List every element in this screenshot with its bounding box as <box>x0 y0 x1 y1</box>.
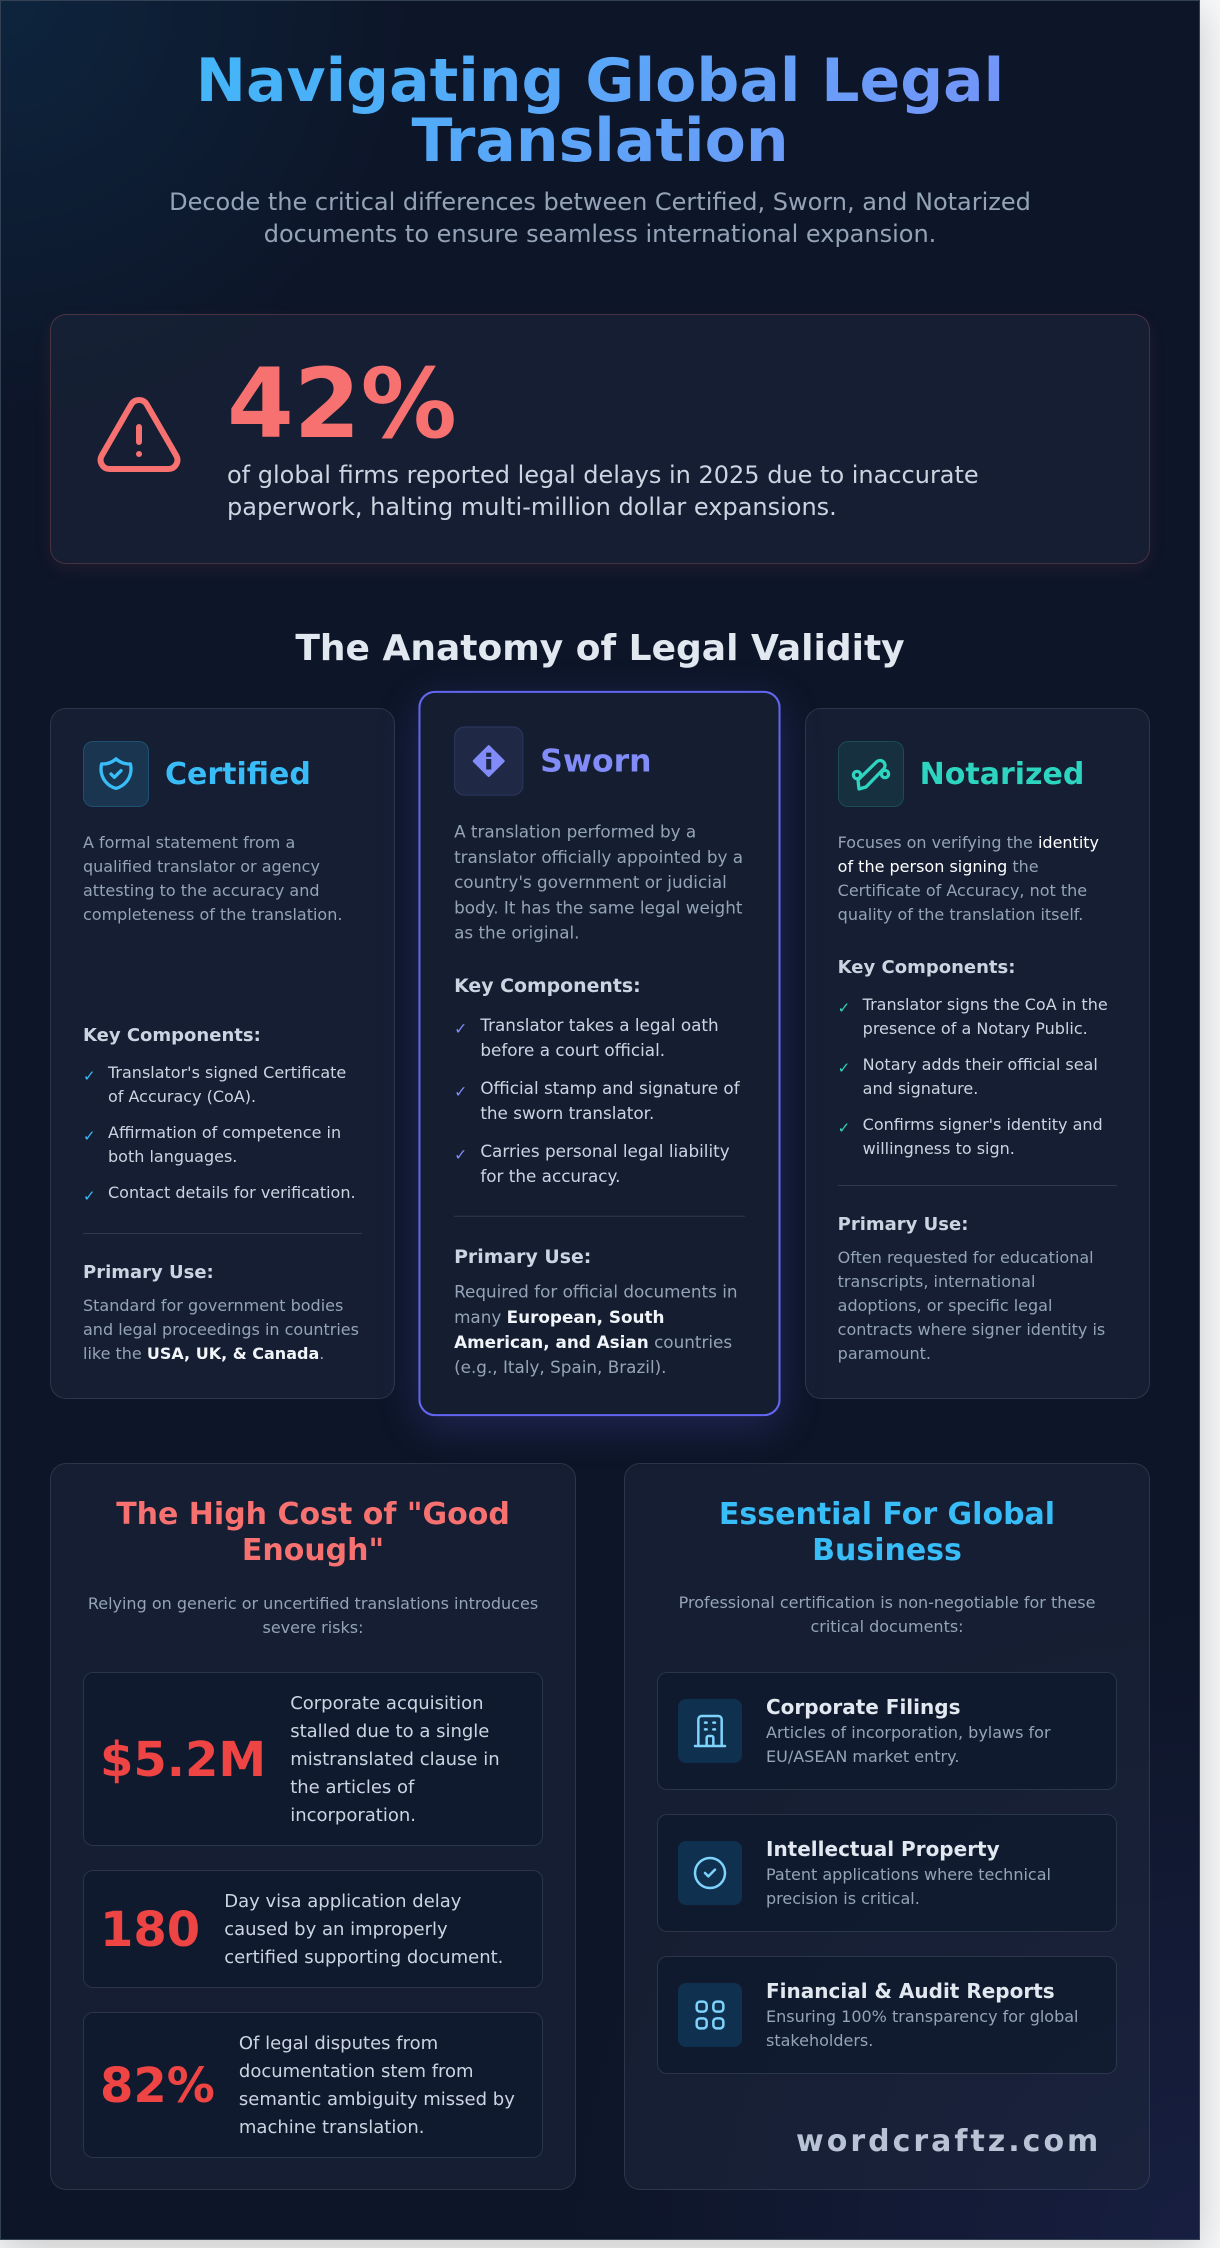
risk: 180 days <box>83 1870 543 1988</box>
risk: 82% <box>83 2012 543 2158</box>
notarized description: of the person signing the <box>838 857 1039 876</box>
stat text: documentation stem from <box>239 2061 474 2082</box>
icon: diamond info <box>454 726 524 796</box>
panel: sworn (featured) <box>419 691 781 1416</box>
key components list <box>454 1015 740 1186</box>
sworn description: as the original. <box>454 923 580 943</box>
panel: essential for global business <box>624 1463 1150 2190</box>
stat text: Corporate acquisition <box>290 1693 484 1714</box>
section heading: The Anatomy of Legal Validity <box>295 628 905 669</box>
big number 42%: 42% <box>227 348 457 460</box>
icon: shield check <box>83 741 149 807</box>
item text: Patent applications where technical <box>766 1865 1051 1884</box>
primary use heading: Primary Use: <box>83 1262 214 1283</box>
subtitle: documents to ensure seamless international expansion. <box>264 220 936 248</box>
panel intro <box>679 1593 1095 1636</box>
heading: sworn: Sworn <box>540 743 652 780</box>
panel heading <box>719 1497 1055 1568</box>
certified description: A formal statement from a <box>83 833 295 852</box>
icon: warning triangle <box>98 397 180 472</box>
key components heading: Key Components: <box>838 957 1015 978</box>
primary use text: transcripts, international <box>838 1272 1035 1291</box>
key components list: ✓ <box>838 1059 850 1077</box>
sworn description: A translation performed by a <box>454 822 697 842</box>
stat text: stalled due to a single <box>290 1721 489 1742</box>
alert text: of global firms reported legal delays in 2025 due to inaccurate <box>227 461 979 489</box>
panel: certified <box>50 708 395 1399</box>
stat: 180 <box>100 1902 200 1958</box>
primary use text: paramount. <box>838 1344 931 1363</box>
panel intro: severe risks: <box>262 1618 364 1637</box>
panel intro: Relying on generic or uncertified translations introduces <box>88 1594 538 1613</box>
document: financial and audit reports <box>657 1956 1117 2074</box>
item text <box>766 2007 1078 2050</box>
key components list: of Accuracy (CoA). <box>108 1087 256 1106</box>
panel intro: Professional certification is non-negotiable for these <box>679 1593 1095 1612</box>
key components list: ✓ <box>454 1082 468 1101</box>
certified description: qualified translator or agency <box>83 857 320 876</box>
key components heading: Key Components: <box>83 1025 261 1046</box>
brand watermark: wordcraftz.com <box>796 2124 1101 2159</box>
primary use text: (e.g., Italy, Spain, Brazil). <box>454 1357 667 1377</box>
item text: stakeholders. <box>766 2031 873 2050</box>
sworn description <box>454 822 743 943</box>
icon: building <box>678 1699 742 1763</box>
certified description: completeness of the translation. <box>83 905 342 924</box>
alert text: paperwork, halting multi-million dollar expansions. <box>227 493 837 521</box>
key components list: ✓ <box>83 1067 96 1085</box>
stat text: Of legal disputes from <box>239 2033 438 2054</box>
primary use text: contracts where signer identity is <box>838 1320 1105 1339</box>
stat text: mistranslated clause in <box>290 1749 500 1770</box>
primary use text <box>838 1248 1105 1363</box>
stat text <box>290 1693 500 1826</box>
stat text: the articles of <box>290 1777 414 1798</box>
key components list: Carries personal legal liability <box>481 1141 730 1161</box>
subtitle: Decode the critical differences between Certified, Sworn, and Notarized <box>169 188 1031 216</box>
icon: check circle <box>678 1841 742 1905</box>
title: Navigating Global Legal <box>196 46 1004 116</box>
panel heading: Enough" <box>242 1533 384 1568</box>
primary use text: and legal proceedings in countries <box>83 1320 359 1339</box>
document: corporate filings <box>657 1672 1117 1790</box>
key components list: ✓ <box>838 999 850 1017</box>
key components list: the sworn translator. <box>481 1103 655 1123</box>
key components list: willingness to sign. <box>863 1139 1015 1158</box>
item text: Articles of incorporation, bylaws for <box>766 1723 1051 1742</box>
key components list: Translator takes a legal oath <box>481 1015 719 1035</box>
certified description <box>83 833 342 924</box>
title <box>50 51 1150 171</box>
key components list: Confirms signer's identity and <box>863 1115 1103 1134</box>
primary use text <box>454 1282 738 1377</box>
primary use text <box>83 1296 359 1363</box>
key components list: ✓ <box>454 1019 468 1038</box>
stat text: incorporation. <box>290 1805 416 1826</box>
primary use text: Often requested for educational <box>838 1248 1094 1267</box>
subtitle <box>169 188 1031 248</box>
stat text: Day visa application delay <box>224 1891 461 1912</box>
stat text: semantic ambiguity missed by <box>239 2089 515 2110</box>
key components list <box>83 1063 356 1205</box>
stat text: machine translation. <box>239 2117 424 2138</box>
primary use heading: Primary Use: <box>454 1246 592 1268</box>
panel intro <box>88 1594 538 1637</box>
item title: Financial & Audit Reports <box>766 1979 1055 2003</box>
certified description: attesting to the accuracy and <box>83 881 320 900</box>
key components list <box>838 995 1108 1158</box>
heading: certified: Certified <box>165 757 311 792</box>
icon: pencil and seal <box>838 741 904 807</box>
sworn description: body. It has the same legal weight <box>454 898 743 918</box>
icon: grid <box>678 1983 742 2047</box>
item text: precision is critical. <box>766 1889 920 1908</box>
notarized description: Focuses on verifying the identity <box>838 833 1099 852</box>
stat text <box>239 2033 515 2138</box>
stat text: certified supporting document. <box>224 1947 503 1968</box>
title: Translation <box>411 106 789 176</box>
item text <box>766 1865 1051 1908</box>
document: intellectual property <box>657 1814 1117 1932</box>
panel heading <box>116 1497 510 1568</box>
panel intro: critical documents: <box>810 1617 964 1636</box>
key components list: and signature. <box>863 1079 978 1098</box>
primary use heading: Primary Use: <box>838 1214 968 1235</box>
key components list: Translator signs the CoA in the <box>863 995 1108 1014</box>
panel: notarized <box>805 708 1150 1399</box>
risk: $5.2M <box>83 1672 543 1846</box>
key components list: Translator's signed Certificate <box>108 1063 346 1082</box>
key components list: ✓ <box>454 1145 468 1164</box>
panel: 42% alert statistic <box>50 314 1150 564</box>
key components list: ✓ <box>83 1127 96 1145</box>
item title: Corporate Filings <box>766 1695 960 1719</box>
primary use text: like the USA, UK, & Canada. <box>83 1344 324 1363</box>
panel heading: The High Cost of "Good <box>116 1497 510 1532</box>
primary use text: adoptions, or specific legal <box>838 1296 1052 1315</box>
key components list: presence of a Notary Public. <box>863 1019 1088 1038</box>
item text: EU/ASEAN market entry. <box>766 1747 959 1766</box>
primary use text: many European, South <box>454 1307 665 1327</box>
stat: $5.2M <box>100 1732 266 1788</box>
sworn description: country's government or judicial <box>454 872 727 892</box>
alert text <box>227 461 979 521</box>
notarized description: quality of the translation itself. <box>838 905 1083 924</box>
item text: Ensuring 100% transparency for global <box>766 2007 1078 2026</box>
heading: notarized: Notarized <box>920 757 1084 792</box>
key components list: Official stamp and signature of <box>481 1078 740 1098</box>
notarized description: Certificate of Accuracy, not the <box>838 881 1087 900</box>
panel heading: Essential For Global <box>719 1497 1055 1532</box>
panel heading: Business <box>812 1533 962 1568</box>
key components list: Affirmation of competence in <box>108 1123 341 1142</box>
key components list: Notary adds their official seal <box>863 1055 1098 1074</box>
key components list: before a court official. <box>481 1040 665 1060</box>
primary use text: Required for official documents in <box>454 1282 738 1302</box>
primary use text: Standard for government bodies <box>83 1296 343 1315</box>
item text <box>766 1723 1051 1766</box>
panel: high cost of good enough <box>50 1463 576 2190</box>
stat text <box>224 1891 503 1968</box>
key components list: Contact details for verification. <box>108 1183 356 1202</box>
key components heading: Key Components: <box>454 975 641 997</box>
notarized description <box>838 833 1099 924</box>
stat: 82% <box>100 2058 215 2114</box>
key components list: both languages. <box>108 1147 237 1166</box>
key components list: for the accuracy. <box>481 1166 621 1186</box>
item title: Intellectual Property <box>766 1837 1000 1861</box>
key components list: ✓ <box>83 1187 96 1205</box>
primary use text: American, and Asian countries <box>454 1332 732 1352</box>
sworn description: translator officially appointed by a <box>454 847 743 867</box>
stat text: caused by an improperly <box>224 1919 448 1940</box>
key components list: ✓ <box>838 1119 850 1137</box>
